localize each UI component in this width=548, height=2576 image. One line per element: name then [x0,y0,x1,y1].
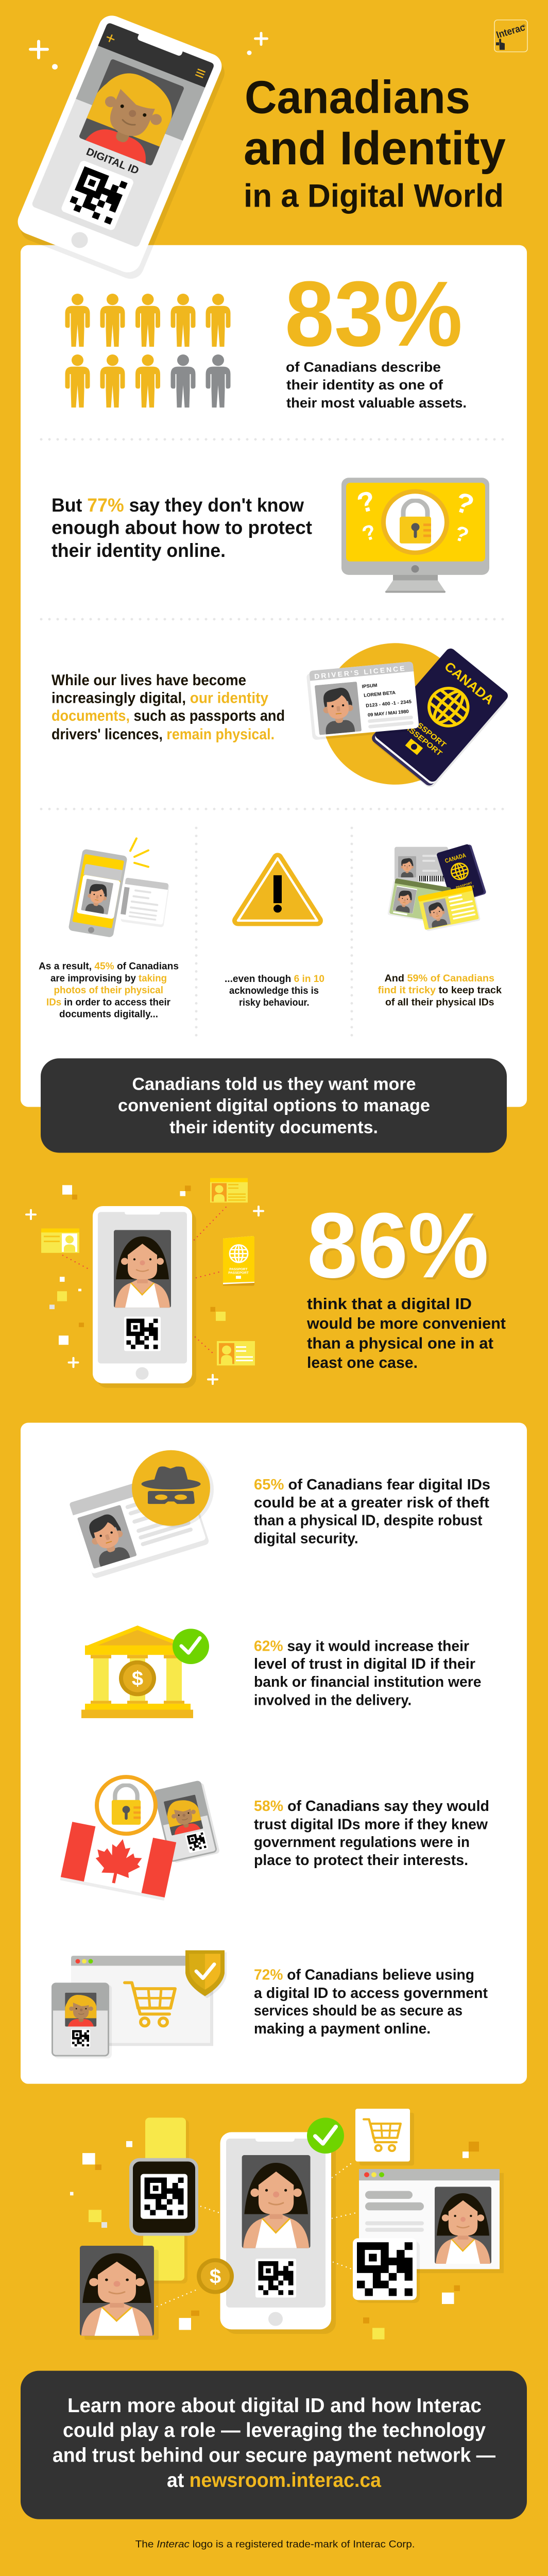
text: 86% description: would be more convenient [306,1314,506,1332]
illustration: monitor with lock: ? [451,486,478,521]
text: 58%: place to protect their interests. [254,1852,468,1869]
illustration: Canadian flag, lock, digital ID [60,1777,220,1901]
text: identity documents remain physical [52,671,285,743]
call to action: could play a role — leveraging the technology [63,2419,486,2442]
logo: Interac: ® [522,24,525,28]
text: 6 in 10 column: risky behaviour. [239,997,309,1008]
illustration: ID theft [69,1450,214,1579]
text: 59% column: And 59% of Canadians [384,973,494,984]
call to action: at newsroom.interac.ca [167,2469,382,2492]
passport: CANADA [441,659,496,707]
text: 72% [254,1967,488,2037]
text: 86% description: than a physical one in at [307,1334,494,1352]
text: 6 in 10 column: acknowledge this is [229,985,319,996]
icon: yellow passport: PASSPORT [229,1268,248,1272]
text: 62%: level of trust in digital ID if their [254,1656,476,1672]
driver's licence: 09 MAY / MAI 1980 [368,709,409,718]
logo: Interac [494,20,527,52]
illustration: tilted phone with digital ID [12,12,231,283]
illustration: secure online shopping with digital ID [53,1951,227,2058]
home button [69,230,90,250]
icon: ID card bottom right [217,1341,255,1365]
passport [369,647,511,790]
mini passport: PASSPORT [456,882,473,889]
icon: sparkles top [29,32,268,70]
text: 86% description [306,1295,506,1371]
text: 62%: 62% say it would increase their [254,1638,469,1654]
illustration: bank with coin and check [81,1625,209,1718]
text: 72%: services should be as secure as [254,2003,463,2019]
mini passport: CANADA [444,852,467,865]
illustration: phone with digital ID [93,1206,196,1388]
text: 65%: digital security. [254,1530,358,1547]
logo: Interac: Interac [495,22,526,41]
illustration: monitor with lock: ? [452,521,472,547]
text: 77% statement: enough about how to protect [52,517,312,538]
call to action: and trust behind our secure payment network — [53,2444,496,2466]
call to action: Learn more about digital ID and how Interac [67,2394,482,2417]
title: in a Digital World [244,177,504,214]
callout: convenient digital options: convenient digital options to manage [118,1096,430,1115]
text: 45% column: photos of their physical [54,985,163,996]
text: 59% column: find it tricky to keep track [378,985,502,996]
phone screen [31,22,215,248]
text: 77% statement: But 77% say they don't know [52,495,304,516]
text: 45% column: IDs in order to access their [46,997,170,1008]
text: identity documents remain physical: increasingly digital, our identity [52,689,268,706]
text: 83% description: their most valuable assets. [286,395,467,411]
illustration: portrait card [80,2246,159,2340]
dotted dividers [41,439,507,1923]
maple leaf [91,1835,145,1888]
call to action [21,2371,527,2519]
driver's licence: LOREM BETA [364,690,396,698]
icon: large QR tile [353,2238,420,2303]
text: 83% description [286,359,467,411]
yellow ID [418,885,481,931]
icon: ID card top [210,1178,248,1202]
driver's licence: D123 - 400 -1 - 2345 [366,699,412,708]
portrait [79,59,184,166]
text: 58% [254,1798,489,1869]
panel: top white panel [21,245,527,1107]
icon: shopping cart tile [355,2109,414,2165]
ID device [54,1985,112,2058]
text: 86% description: think that a digital ID [307,1295,472,1313]
title [244,72,506,214]
footer note: The Interac logo is a registered trade-mark of Interac Corp. [135,2539,415,2550]
text: 72%: making a payment online. [254,2020,431,2037]
decorative squares and plus signs, section 86% [26,1185,263,1384]
text: 6 in 10 column [225,973,324,1008]
illustration: smartwatch with QR [129,2117,198,2283]
icon: yellow passport [223,1236,254,1286]
text: 83% description: of Canadians describe [286,359,441,375]
mini passport: PASSEPORT [456,885,475,893]
text: 77% statement: their identity online. [52,540,226,561]
QR code [60,160,134,231]
passport: PASSEPORT [399,720,443,758]
text: 62%: bank or financial institution were [254,1673,481,1690]
decorative squares, lower section [70,2141,479,2340]
text: identity documents remain physical: drivers' licences, remain physical. [52,725,275,743]
text: 6 in 10 column: ...even though 6 in 10 [225,973,324,985]
text: identity documents remain physical: While our lives have become [52,671,246,689]
driver's licence: DRIVER'S LICENCE [314,665,405,681]
text: identity documents remain physical: documents, such as passports and [52,707,285,724]
driver's licence: IPSUM [362,683,378,689]
text: 83% description: their identity as one of [286,377,443,393]
illustration: browser window with portrait [359,2169,504,2273]
illustration: monitor with lock: ? [359,520,379,546]
text: 59% column: of all their physical IDs [385,997,494,1008]
illustration: monitor with lock [341,478,489,593]
passport: PASSPORT [406,715,448,750]
panel: second white panel [21,1423,527,2084]
shield [187,1952,227,1998]
text: 45% column [39,961,179,1020]
statistic: 86%: 86% [310,1195,491,1299]
text: 58%: government regulations were in [254,1834,470,1851]
label: digital ID: DIGITAL ID [84,146,141,177]
green ID [387,878,451,925]
pictogram: people 8 of 10 [65,294,231,408]
title: Canadians [245,72,470,123]
callout: convenient digital options: Canadians told us they want more [132,1075,416,1094]
mini passport [436,843,487,904]
illustration: monitor with lock: ? [353,484,379,519]
illustration: multiple ID documents [387,843,487,931]
text: 65%: than a physical ID, despite robust [254,1512,483,1529]
icon: warning triangle [238,858,317,921]
callout: convenient digital options [41,1058,507,1153]
text: 65%: 65% of Canadians fear digital IDs [254,1477,490,1493]
illustration: passport and licence [306,643,511,790]
illustration: phone with digital ID and check [220,2117,344,2334]
icon: thief hat and mask [141,1466,201,1504]
text: 65% [254,1477,490,1547]
icon: ID card left [41,1228,79,1253]
text: 58%: 58% of Canadians say they would [254,1798,489,1815]
text: 72%: a digital ID to access government [254,1985,488,2002]
text: 72%: 72% of Canadians believe using [254,1967,474,1983]
title: and Identity [244,122,506,175]
text: 58%: trust digital IDs more if they knew [254,1816,488,1833]
icon: coin [197,2258,234,2294]
text: 77% statement [52,495,312,561]
text: 59% column [378,973,502,1008]
text: 86% description: least one case. [307,1354,418,1371]
text: 45% column: documents digitally... [59,1009,158,1020]
statistic: 86%: 86% [307,1193,489,1297]
text: 45% column: are improvising by taking [50,973,167,984]
text: 65%: could be at a greater risk of theft [254,1494,489,1511]
callout: convenient digital options: their identity documents. [169,1118,378,1137]
driver's licence [306,662,419,740]
text: 62% [254,1638,481,1708]
text: 45% column: As a result, 45% of Canadians [39,961,179,972]
text: 62%: involved in the delivery. [254,1692,412,1708]
icon: yellow passport: PASSEPORT [228,1272,249,1275]
illustration: phone photographing an ID [68,838,170,938]
statistic: 83%: 83% [285,262,463,365]
